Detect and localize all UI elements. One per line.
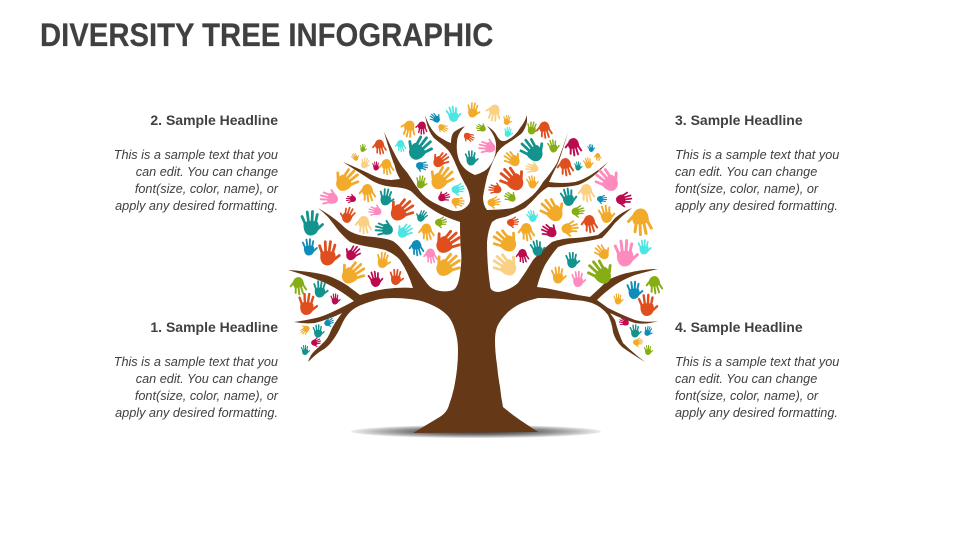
hands: upper left canopy [302, 102, 481, 281]
panel: headline 1: font(size, color, name), or [135, 389, 278, 403]
panel: headline 1: 1. Sample Headline [150, 319, 278, 335]
panel: headline 2 [114, 112, 278, 213]
panel: headline 3: can edit. You can change [675, 165, 817, 179]
panel: headline 2: font(size, color, name), or [135, 182, 278, 196]
panel: headline 1 [114, 319, 278, 420]
panel: headline 4 [675, 319, 839, 420]
hands: lower left canopy [289, 239, 404, 355]
panel: headline 1: can edit. You can change [136, 372, 278, 386]
panel: headline 4: 4. Sample Headline [675, 319, 803, 335]
hands: lower right canopy [552, 240, 663, 355]
panel: headline 3: font(size, color, name), or [675, 182, 818, 196]
panel: headline 4: apply any desired formatting. [675, 406, 838, 420]
tree trunk and branches [288, 115, 658, 433]
ground shadow [351, 425, 601, 438]
panel: headline 2: can edit. You can change [136, 165, 278, 179]
hands: upper right canopy [475, 103, 652, 280]
title: DIVERSITY TREE INFOGRAPHIC [40, 16, 493, 52]
panel: headline 4: This is a sample text that you [675, 355, 839, 369]
panel: headline 2: apply any desired formatting. [115, 199, 278, 213]
panel: headline 4: font(size, color, name), or [675, 389, 818, 403]
panel: headline 4: can edit. You can change [675, 372, 817, 386]
panel: headline 3: 3. Sample Headline [675, 112, 803, 128]
panel: headline 2: This is a sample text that you [114, 148, 278, 162]
panel: headline 3 [675, 112, 839, 213]
panel: headline 2: 2. Sample Headline [150, 112, 278, 128]
panel: headline 1: This is a sample text that you [114, 355, 278, 369]
panel: headline 3: This is a sample text that you [675, 148, 839, 162]
panel: headline 3: apply any desired formatting. [675, 199, 838, 213]
panel: headline 1: apply any desired formatting. [115, 406, 278, 420]
